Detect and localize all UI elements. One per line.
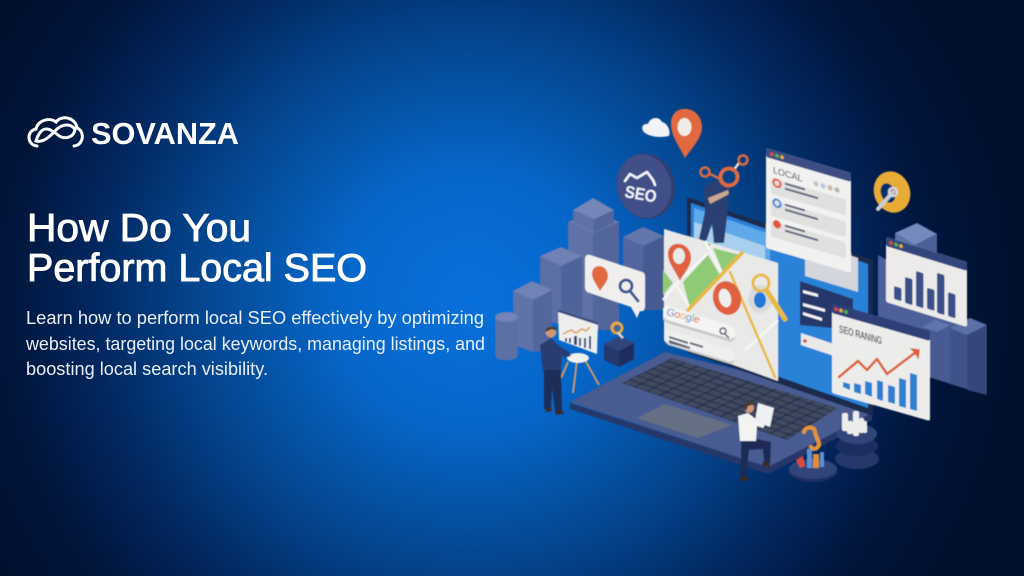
icon: cloud xyxy=(642,118,670,137)
laptop trackpad xyxy=(637,404,732,438)
ranking trend line xyxy=(839,349,919,377)
panel: SEO ranking xyxy=(832,303,930,421)
icon: map pin two xyxy=(709,278,745,318)
person head xyxy=(744,403,754,413)
map green areas xyxy=(663,270,673,295)
disc xyxy=(835,449,879,469)
icon: blue map marker xyxy=(748,285,772,313)
presenter with chart easel xyxy=(540,309,634,415)
person shoes xyxy=(740,462,770,481)
map white roads xyxy=(663,241,778,350)
person body xyxy=(699,181,730,243)
right city buildings xyxy=(878,223,987,395)
icon: orange network nodes xyxy=(700,156,748,186)
icon: map pin one xyxy=(668,244,691,281)
building: small cylinder xyxy=(495,312,518,360)
icon: cloud logo xyxy=(29,118,82,146)
person: standing presenter xyxy=(540,326,571,415)
icon: top location pin xyxy=(671,109,702,158)
icon: bubble magnifier xyxy=(620,280,638,301)
listing row two xyxy=(771,198,846,238)
screen navy menu card xyxy=(800,281,853,330)
easel legs xyxy=(561,360,599,393)
heart icon xyxy=(796,456,805,468)
ranking bars xyxy=(843,373,917,411)
screen grey block xyxy=(805,240,858,292)
building: far right tower xyxy=(950,318,987,395)
Google search bar: Google xyxy=(665,306,701,326)
Google search bar xyxy=(663,305,735,342)
icon: search magnifier xyxy=(720,328,729,338)
panel: local listings xyxy=(766,148,851,273)
icon: yellow magnifier xyxy=(753,275,785,319)
report sheet xyxy=(755,403,774,427)
building: low tower xyxy=(513,281,552,352)
search speech bubble xyxy=(585,255,645,318)
person legs xyxy=(741,439,771,477)
description text: boosting local search visibility. xyxy=(26,359,268,379)
icon: SEO badge xyxy=(610,147,682,225)
pin on cube xyxy=(604,323,634,367)
disc xyxy=(837,424,877,444)
screen white row xyxy=(801,333,834,356)
screen light panel xyxy=(694,208,770,262)
title: How Do You xyxy=(27,207,251,250)
building: right tower xyxy=(623,227,664,310)
person arm xyxy=(708,190,729,204)
brand logo xyxy=(29,116,239,151)
mini column icons xyxy=(807,449,812,468)
easel seat xyxy=(567,353,589,363)
person on laptop holding network icon xyxy=(699,156,748,243)
stacked data discs with white cylinders xyxy=(835,411,879,469)
person torso xyxy=(738,413,765,441)
title xyxy=(27,207,367,290)
left city buildings xyxy=(495,198,664,360)
disc xyxy=(836,436,878,456)
bar chart xyxy=(894,259,956,318)
building: mid right tower xyxy=(922,320,951,384)
laptop keyboard xyxy=(622,358,838,440)
description text: Learn how to perform local SEO effectively by optimizing xyxy=(26,308,484,328)
illustration: local SEO laptop scene xyxy=(495,109,987,482)
map yellow roads xyxy=(688,253,775,377)
icon: yellow ring with wrench xyxy=(868,166,916,218)
icon: SEO badge: SEO xyxy=(623,182,658,206)
building: tall tower xyxy=(568,198,619,330)
laptop screen xyxy=(687,197,873,416)
building: mid tower xyxy=(540,247,582,325)
panel: bar chart window xyxy=(886,237,967,327)
icon: bubble pin xyxy=(592,266,608,291)
platform with question mark and charts xyxy=(789,428,837,482)
question mark xyxy=(804,428,819,449)
brand name: SOVANZA xyxy=(91,116,239,151)
search result block xyxy=(664,329,734,364)
panel: map xyxy=(663,229,785,381)
description text xyxy=(25,308,485,379)
mini chart board xyxy=(558,309,598,354)
panel: SEO ranking: SEO RANING xyxy=(839,324,882,347)
title: Perform Local SEO xyxy=(27,247,367,290)
panel: local listings: LOCAL xyxy=(773,165,803,184)
description text: websites, targeting local keywords, managing listings, and xyxy=(25,334,485,354)
status dots xyxy=(813,180,840,193)
white cylinders xyxy=(842,411,867,436)
listing row one xyxy=(771,177,846,216)
listing row three xyxy=(771,218,846,259)
laptop base xyxy=(570,352,872,474)
building: back tower with cap xyxy=(878,223,960,350)
kneeling person reading report xyxy=(738,402,774,481)
